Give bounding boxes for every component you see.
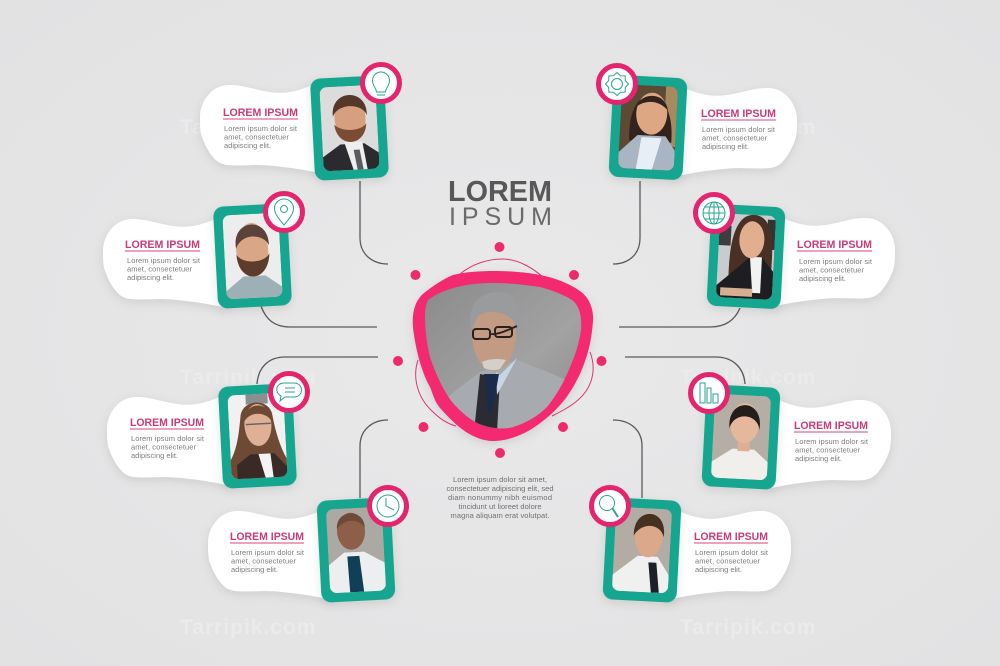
watermarks: Tarripik.com bbox=[680, 116, 816, 139]
icon: globe bbox=[696, 194, 732, 232]
body text: adipiscing elit. bbox=[702, 142, 749, 151]
blob card bbox=[103, 214, 228, 308]
blob card bbox=[770, 213, 895, 307]
heading: LOREM IPSUM bbox=[797, 239, 872, 251]
blob card bbox=[666, 506, 791, 600]
watermarks: Tarripik.com bbox=[180, 366, 316, 389]
connector lines bbox=[257, 181, 745, 498]
accent dots bbox=[393, 242, 606, 458]
watermarks bbox=[180, 116, 816, 639]
body text: adipiscing elit. bbox=[799, 274, 846, 283]
body text: amet, consectetuer bbox=[795, 446, 860, 454]
heading: LOREM IPSUM bbox=[694, 531, 768, 543]
watermarks: Tarripik.com bbox=[680, 616, 816, 639]
heading: LOREM IPSUM bbox=[230, 531, 304, 543]
body text bbox=[702, 125, 776, 151]
blob card bbox=[107, 392, 232, 486]
photo frame bbox=[316, 497, 396, 603]
body text: adipiscing elit. bbox=[695, 565, 742, 574]
panel: bottom-left person bbox=[208, 488, 406, 603]
body text: Lorem ipsum dolor sit bbox=[799, 257, 873, 266]
photo frame bbox=[602, 497, 682, 603]
center description text: diam nonummy nibh euismod bbox=[448, 493, 552, 502]
body text: amet, consectetuer bbox=[695, 556, 760, 566]
heading: LOREM IPSUM bbox=[125, 239, 200, 251]
panel: upper-right person bbox=[696, 194, 895, 309]
blob card bbox=[200, 80, 325, 174]
body text bbox=[799, 257, 873, 283]
body text: amet, consectetuer bbox=[231, 556, 296, 566]
body text: amet, consectetuer bbox=[702, 134, 768, 142]
icon: magnifier bbox=[592, 488, 628, 524]
icon: gear bbox=[598, 66, 636, 102]
center description text: Lorem ipsum dolor sit amet, bbox=[453, 475, 547, 484]
heading: LOREM IPSUM bbox=[701, 108, 776, 120]
body text: adipiscing elit. bbox=[231, 565, 278, 574]
body text: Lorem ipsum dolor sit bbox=[224, 124, 298, 133]
body text: adipiscing elit. bbox=[127, 273, 174, 282]
panel: lower-left person bbox=[107, 374, 308, 489]
photo frame bbox=[701, 384, 781, 490]
heading: LOREM IPSUM bbox=[223, 107, 298, 119]
photo frame bbox=[218, 383, 297, 489]
portrait photo bbox=[420, 280, 585, 432]
photo frame bbox=[213, 203, 292, 309]
title: LOREM bbox=[448, 176, 552, 208]
photo frame bbox=[706, 204, 786, 309]
panel: top-right person bbox=[598, 66, 797, 180]
blob card bbox=[672, 83, 797, 177]
icon: clock bbox=[370, 488, 406, 524]
panel: top-left person bbox=[200, 64, 400, 181]
body text: adipiscing elit. bbox=[795, 454, 842, 463]
blob card bbox=[208, 506, 333, 600]
title bbox=[448, 176, 552, 231]
panel: bottom-right person bbox=[592, 488, 791, 603]
body text: adipiscing elit. bbox=[131, 451, 178, 460]
heading: LOREM IPSUM bbox=[794, 420, 868, 432]
icon: map pin bbox=[266, 194, 302, 230]
center description text: magna aliquam erat volutpat. bbox=[450, 511, 550, 520]
watermarks: Tarripik.com bbox=[180, 616, 316, 639]
photo frame bbox=[310, 75, 389, 181]
body text bbox=[795, 437, 869, 463]
panel: lower-right person bbox=[690, 374, 891, 490]
infographic canvas bbox=[102, 62, 896, 608]
body text bbox=[231, 548, 305, 574]
body text: amet, consectetuer bbox=[131, 442, 196, 452]
title: IPSUM bbox=[449, 203, 552, 231]
body text: Lorem ipsum dolor sit bbox=[231, 548, 305, 557]
center description text: consectetuer adipiscing elit, sed bbox=[446, 484, 554, 493]
body text: Lorem ipsum dolor sit bbox=[702, 125, 776, 134]
center description text bbox=[446, 475, 554, 520]
body text: Lorem ipsum dolor sit bbox=[795, 437, 869, 446]
orbit curves bbox=[416, 259, 593, 426]
body text: adipiscing elit. bbox=[224, 141, 271, 150]
body text bbox=[131, 434, 205, 460]
body text: amet, consectetuer bbox=[799, 266, 864, 274]
body text: amet, consectetuer bbox=[127, 264, 192, 274]
body text: Lorem ipsum dolor sit bbox=[127, 256, 201, 265]
panel: upper-left person bbox=[103, 194, 302, 309]
center description text: tincidunt ut lioreet dolore bbox=[458, 502, 542, 511]
body text bbox=[695, 548, 769, 574]
body text bbox=[127, 256, 201, 282]
heading: LOREM IPSUM bbox=[130, 417, 204, 429]
watermarks: Tarripik.com bbox=[180, 116, 316, 139]
blob card bbox=[766, 395, 891, 489]
body text: Lorem ipsum dolor sit bbox=[131, 434, 205, 443]
panel: central portrait bbox=[393, 242, 606, 458]
icon: bar chart bbox=[690, 374, 728, 412]
photo frame bbox=[608, 75, 688, 180]
watermarks: Tarripik.com bbox=[680, 366, 816, 389]
pink shield ring bbox=[413, 271, 593, 441]
icon: light bulb bbox=[362, 64, 400, 102]
icon: speech bubble bbox=[270, 374, 308, 410]
body text bbox=[224, 124, 298, 150]
body text: amet, consectetuer bbox=[224, 132, 290, 142]
body text: Lorem ipsum dolor sit bbox=[695, 548, 769, 557]
